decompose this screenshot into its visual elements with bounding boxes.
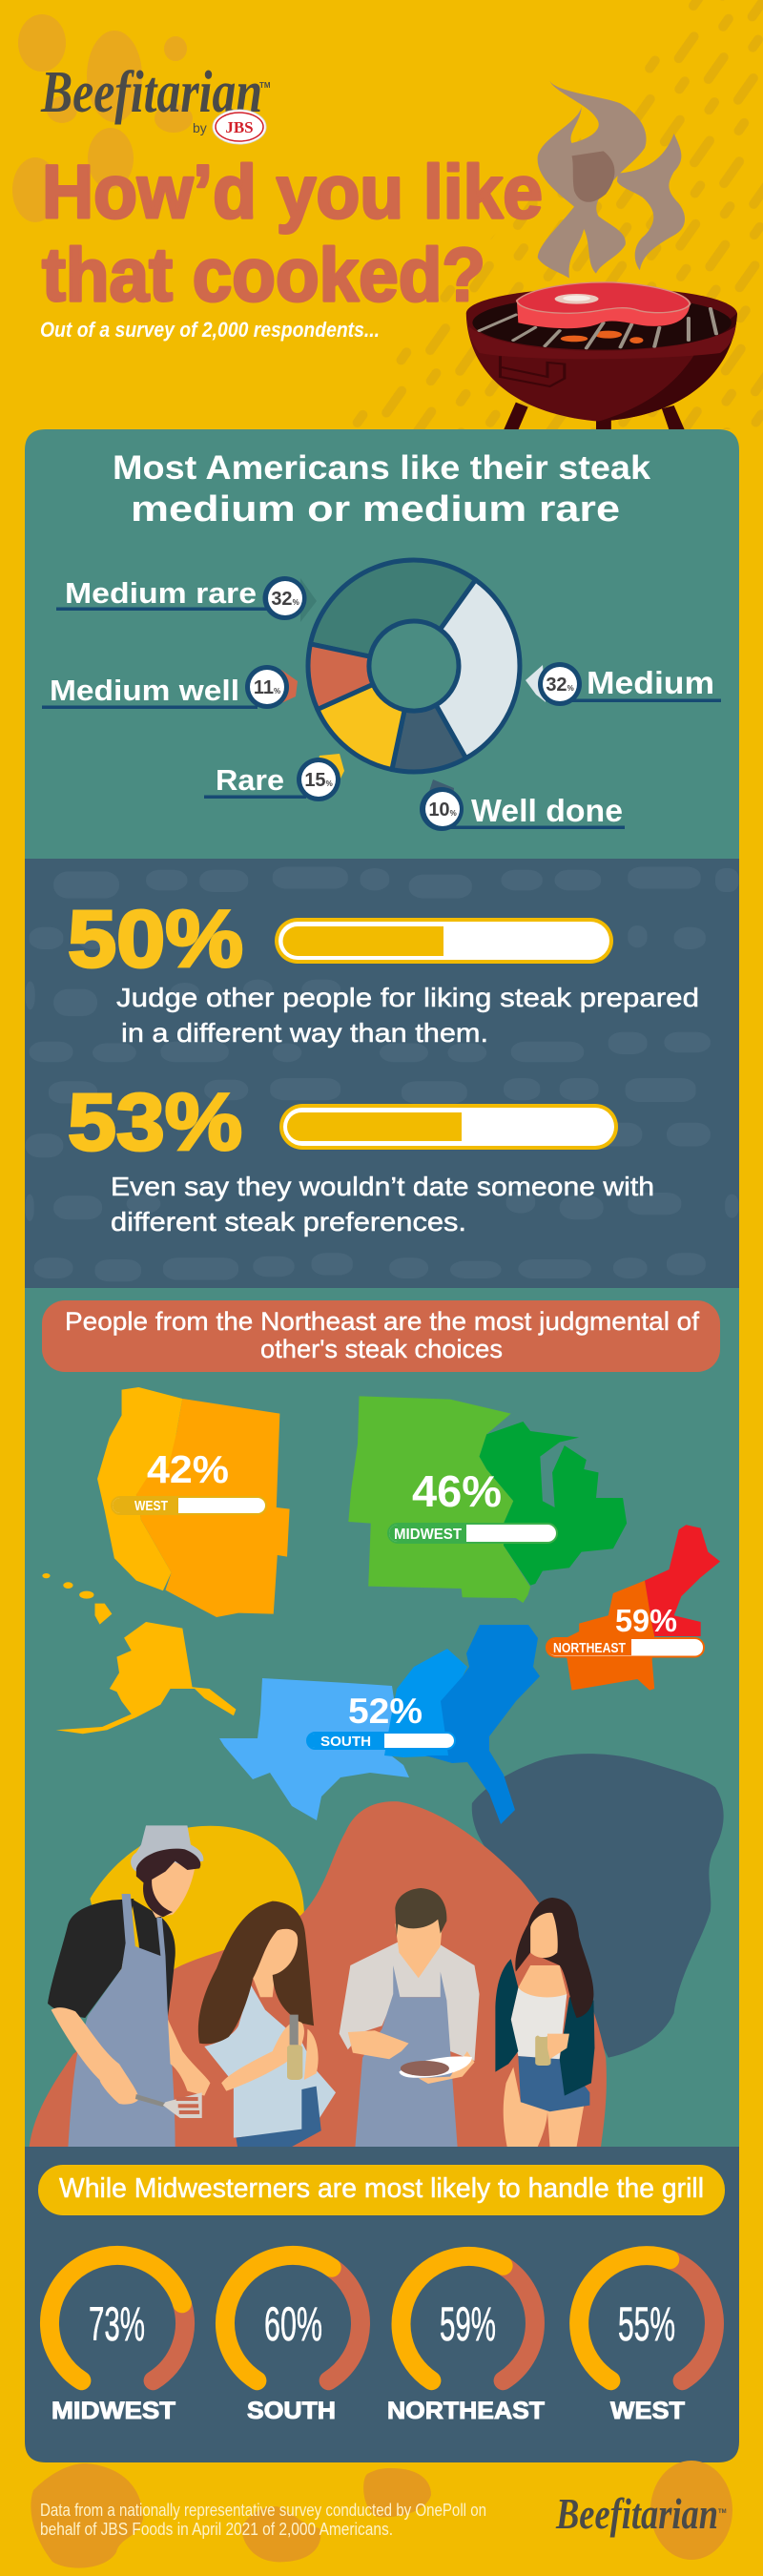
grill legs — [504, 403, 685, 430]
label: Northeast 59% — [546, 1603, 704, 1656]
label: Northeast 59%: NORTHEAST — [553, 1640, 626, 1656]
label: West 42% — [112, 1447, 266, 1514]
smoke — [538, 62, 685, 279]
background blobs — [30, 1754, 724, 2147]
label: West 42%: 42% — [147, 1447, 229, 1491]
coals — [561, 331, 643, 343]
title — [42, 149, 543, 317]
title: that cooked? — [42, 232, 485, 317]
label: Midwest 46%: 46% — [412, 1466, 502, 1516]
label: Midwest 46% — [388, 1466, 557, 1543]
footer blobs — [31, 2461, 732, 2568]
paw blobs top left — [12, 14, 193, 222]
callout: Rare 15%: Rare — [216, 763, 284, 797]
heading: Midwesterners — [38, 2165, 725, 2215]
grill bowl — [466, 288, 737, 422]
gauge: West 55%: WEST — [610, 2398, 685, 2424]
footer source text — [40, 2501, 486, 2539]
man with hat and spatula — [48, 1825, 210, 2147]
callout: Medium well 11%: Medium well — [50, 674, 239, 707]
logo: Beefitarian by JBS: Beefitarian — [40, 60, 262, 125]
title: How’d you like — [42, 149, 543, 234]
gauge: Midwest 73%: 73% — [89, 2297, 145, 2351]
progress bar 50% — [275, 918, 613, 964]
label: West 42%: WEST — [134, 1498, 168, 1514]
callout: Medium well 11% — [42, 665, 298, 709]
woman with bottle — [198, 1901, 336, 2147]
Hawaii — [42, 1573, 112, 1625]
map: South region — [219, 1625, 540, 1824]
gauge: South 60% — [225, 2255, 361, 2424]
callout: Rare 15%: 15% — [304, 770, 333, 791]
stat: 50%: Judge other people for liking steak prepared — [116, 983, 699, 1012]
map: Midwest region — [348, 1396, 627, 1603]
illustration: four people grilling — [48, 1825, 594, 2147]
callout: Medium rare 32%: Medium rare — [65, 576, 257, 610]
footer source text: Data from a nationally representative survey conducted by OnePoll on — [40, 2501, 486, 2520]
panel: steak doneness background — [25, 429, 739, 859]
label: South 52% — [307, 1692, 455, 1750]
handle — [500, 356, 565, 386]
progress bar 53% — [279, 1104, 618, 1150]
gauge: Midwest 73%: MIDWEST — [52, 2398, 175, 2424]
gauge: West 55%: 55% — [618, 2297, 675, 2351]
stat: 53%: different steak preferences. — [111, 1207, 466, 1236]
stat: 50%: 50% — [68, 894, 243, 984]
steak — [517, 301, 690, 328]
callout: Medium 32%: Medium — [587, 665, 714, 700]
gauge: South 60%: SOUTH — [247, 2398, 336, 2424]
woman with long dark hair — [495, 1898, 594, 2147]
heading: doneness: Most Americans like their steak — [113, 449, 651, 487]
callout: Medium 32% — [526, 662, 721, 706]
callout: Medium 32%: 32% — [546, 675, 574, 696]
label: South 52%: SOUTH — [320, 1734, 371, 1750]
Alaska — [56, 1622, 236, 1734]
heading: Midwesterners: While Midwesterners are most likely to handle the grill — [59, 2173, 704, 2204]
label: Midwest 46%: MIDWEST — [394, 1527, 462, 1543]
stat: 53%: Even say they wouldn’t date someone with — [111, 1172, 654, 1201]
subtitle: Out of a survey of 2,000 respondents... — [40, 318, 380, 342]
gauge: West 55% — [579, 2255, 714, 2424]
gauge: South 60%: 60% — [264, 2297, 322, 2351]
map: Northeast region — [547, 1525, 720, 1691]
heading: Northeast judgmental — [42, 1300, 720, 1372]
stat: 50% — [68, 894, 699, 1048]
panel: grilling stats — [25, 2147, 739, 2462]
callout: Medium well 11%: 11% — [254, 677, 280, 698]
logo: Beefitarian by JBS: TM — [259, 81, 271, 90]
logo: Beefitarian by JBS: by — [193, 120, 207, 135]
heading: Northeast judgmental: People from the Northeast are the most judgmental of — [65, 1307, 700, 1336]
footer logo: TM — [718, 2509, 727, 2515]
stat: 50%: in a different way than them. — [121, 1018, 488, 1048]
grate bars — [480, 308, 716, 348]
gauge: Northeast 59%: 59% — [440, 2297, 496, 2351]
panel: regional maps — [25, 1288, 739, 2147]
footer logo: Beefitarian — [555, 2489, 718, 2538]
label: Northeast 59%: 59% — [615, 1603, 677, 1638]
donut chart — [308, 560, 520, 772]
spatula — [135, 2094, 168, 2107]
man with plate — [340, 1888, 480, 2147]
gauge: Midwest 73% — [50, 2255, 185, 2424]
stat: 53%: 53% — [68, 1077, 242, 1167]
footer source text: behalf of JBS Foods in April 2021 of 2,000 Americans. — [40, 2520, 393, 2539]
panel: judgement stats — [25, 859, 739, 1288]
logo: Beefitarian by JBS: JBS — [225, 118, 254, 136]
heading: doneness — [113, 449, 651, 530]
callout: Well done 10%: Well done — [471, 793, 623, 828]
callout: Medium rare 32% — [56, 576, 317, 622]
callout: Medium rare 32%: 32% — [271, 589, 299, 610]
callout: Well done 10%: 10% — [428, 800, 457, 821]
map: West region — [42, 1387, 290, 1734]
callout: Well done 10% — [420, 779, 625, 831]
heading: doneness: medium or medium rare — [131, 489, 620, 530]
heading: Northeast judgmental: other's steak choices — [260, 1335, 503, 1363]
stat: 53% — [68, 1077, 654, 1236]
logo: Beefitarian by JBS — [40, 60, 271, 144]
gauge: Northeast 59%: NORTHEAST — [387, 2398, 545, 2424]
label: South 52%: 52% — [348, 1692, 423, 1731]
illustration: grill with steak and smoke — [466, 62, 737, 430]
callout: Rare 15% — [204, 754, 344, 801]
gauge: Northeast 59% — [387, 2256, 545, 2424]
